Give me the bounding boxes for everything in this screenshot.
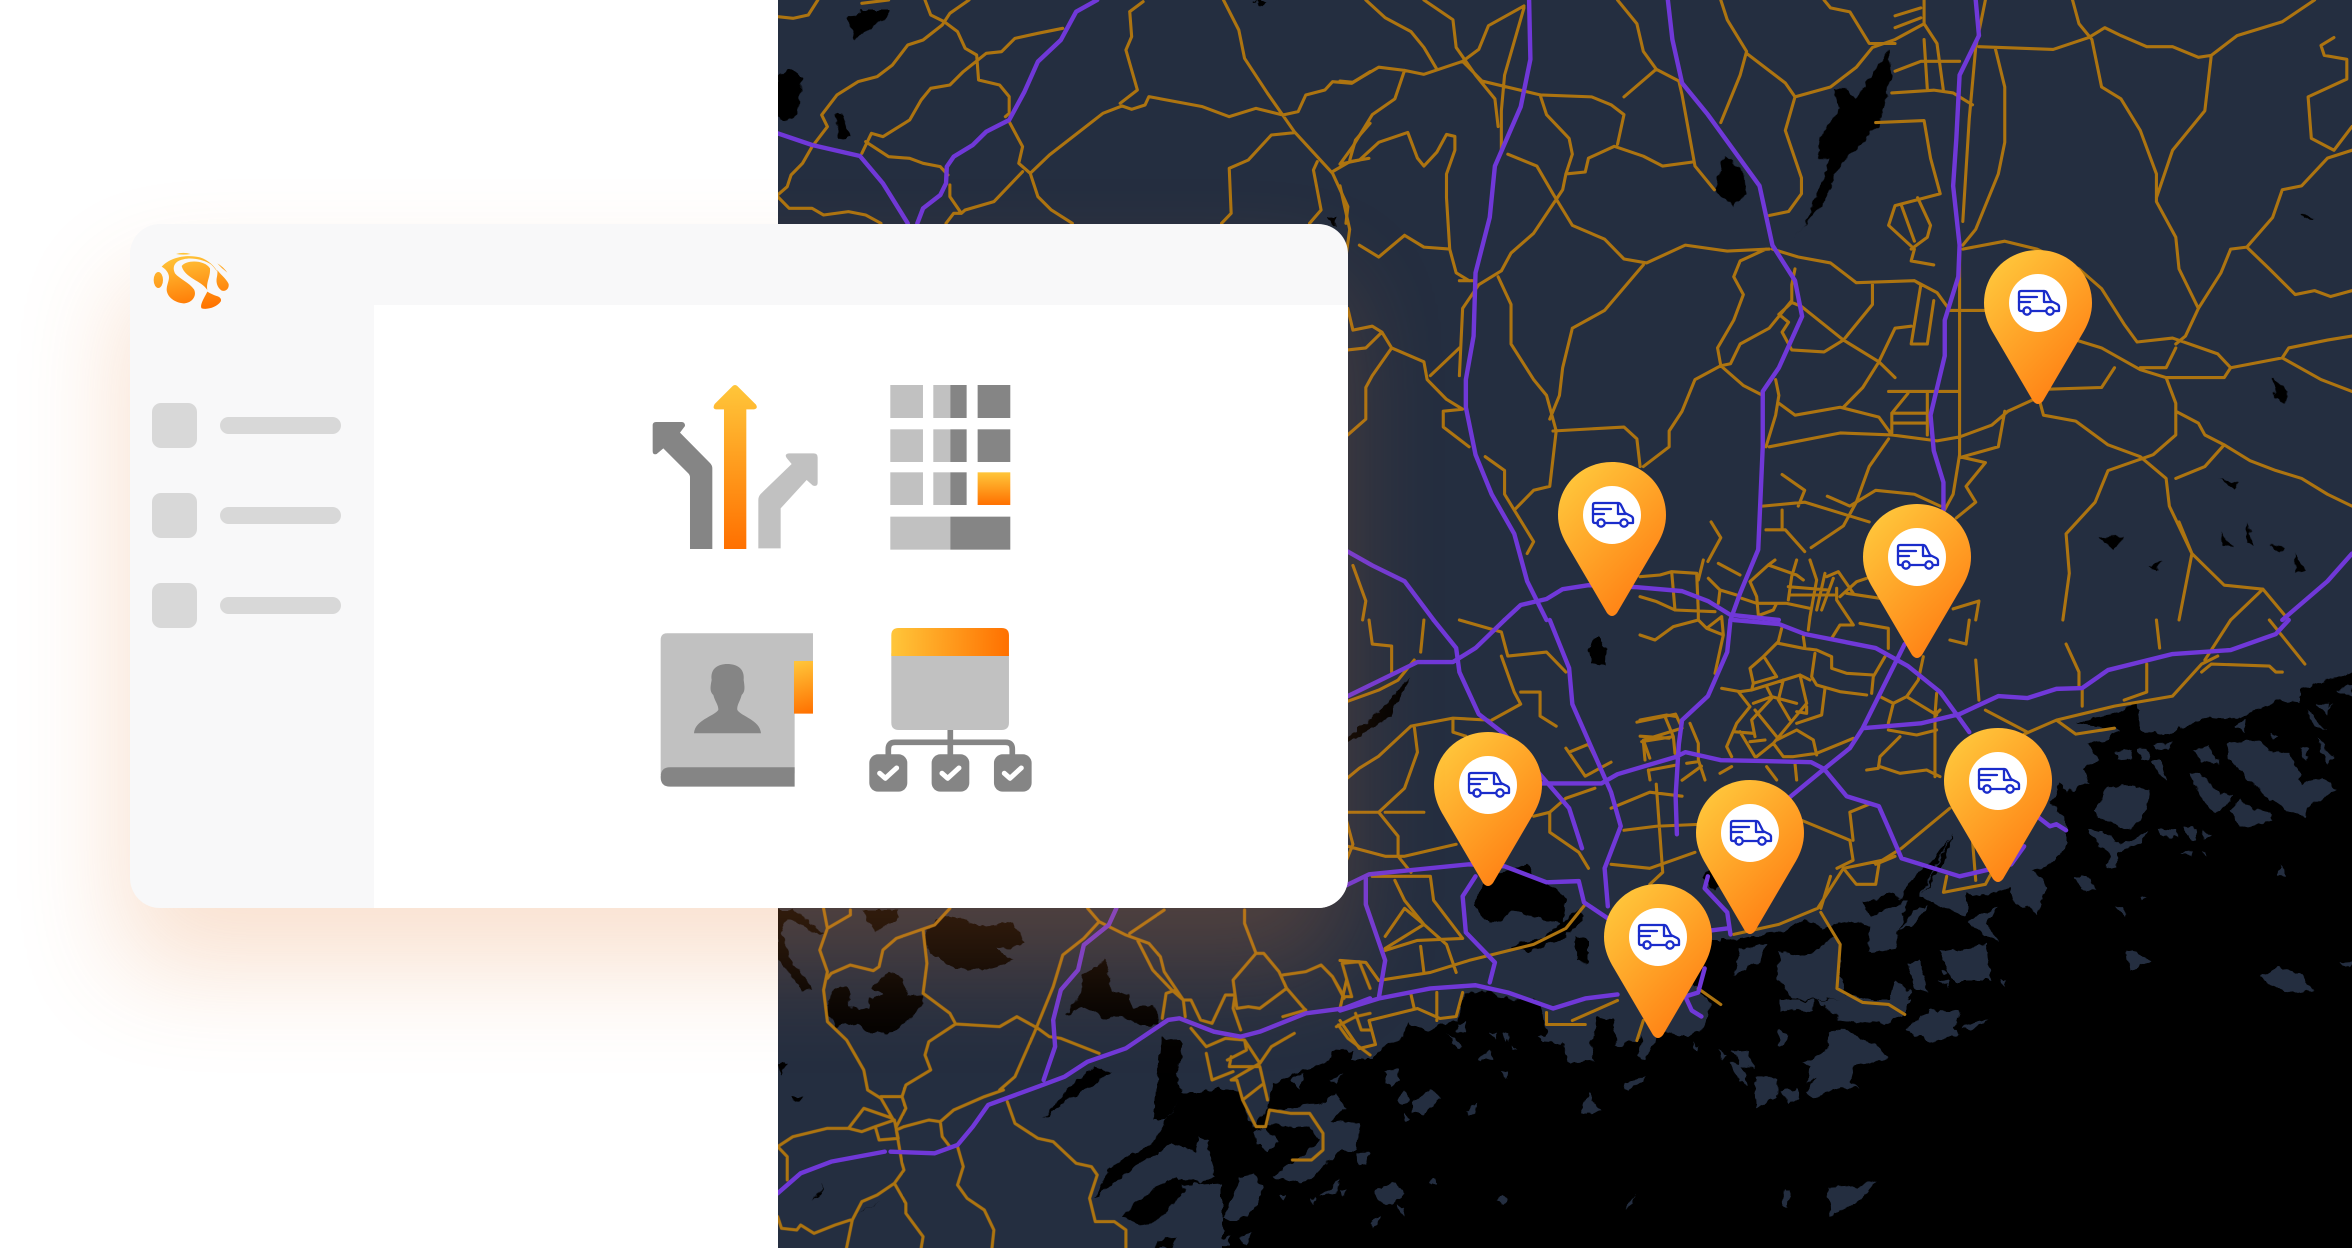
pin: delivery van 3: [1863, 504, 1971, 658]
roads: secondary road network: [778, 0, 2352, 1248]
pin: delivery van 6: [1696, 780, 1804, 934]
sea and coastline: [778, 0, 2352, 1248]
icon: contact book: [661, 633, 813, 787]
panel: app window card: [130, 224, 1348, 908]
pin: delivery van 1: [1984, 250, 2092, 404]
panel: main white content area: [374, 305, 1348, 908]
icon: hierarchy with checkmarks: [869, 628, 1032, 792]
highways: purple main routes: [778, 0, 2352, 1193]
pin: delivery van 2: [1558, 462, 1666, 616]
pin: delivery van 5: [1944, 728, 2052, 882]
logo: orange globe S mark: [154, 253, 229, 309]
pin: delivery van 4: [1434, 732, 1542, 886]
sidebar: menu placeholders: [152, 403, 341, 628]
pin: delivery van 7: [1604, 884, 1712, 1038]
icon: table grid: [890, 385, 1010, 550]
map: dark road map: [778, 0, 2352, 1248]
icon: three-way route arrows: [653, 385, 818, 549]
